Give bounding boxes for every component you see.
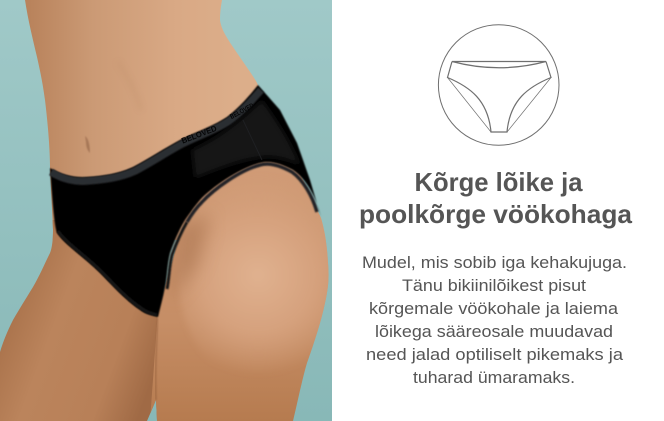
- waistband logo: BELOVED: [180, 124, 218, 145]
- icon leg lines: [448, 78, 551, 132]
- waistband logo: BELOVED: [229, 102, 255, 121]
- briefs: [50, 85, 321, 317]
- shadow under leg opening: [168, 216, 211, 288]
- torso skin: [0, 0, 332, 240]
- body line 1: Mudel, mis sobib iga kehakujuga.: [362, 254, 627, 272]
- icon briefs outline: [448, 62, 551, 132]
- right thigh skin: [150, 166, 328, 421]
- body text: [362, 254, 627, 387]
- lace panel: [192, 100, 300, 178]
- side seam: [243, 120, 262, 160]
- right thigh highlight: [181, 205, 328, 364]
- icon: briefs in circle: [438, 25, 559, 145]
- briefs body: [50, 85, 321, 317]
- leg binding lower: [58, 222, 187, 315]
- body line 4: lõikega sääreosale muudavad: [375, 323, 613, 341]
- body line 6: tuharad ümaramaks.: [413, 369, 575, 387]
- leg binding upper: [187, 164, 317, 222]
- panel: product photo: [0, 0, 340, 421]
- heading line 1: Kõrge lõike ja: [414, 167, 583, 197]
- waistband: [51, 90, 261, 181]
- icon circle: [438, 25, 559, 145]
- heading line 2: poolkõrge vöökohaga: [359, 199, 633, 229]
- body line 3: kõrgemale vöökohale ja laiema: [369, 300, 619, 318]
- heading: [359, 167, 633, 229]
- navel: [85, 136, 90, 153]
- body line 2: Tänu bikiinilõikest pisut: [402, 277, 586, 295]
- thigh crease: [156, 318, 158, 400]
- photo background: [0, 0, 332, 421]
- body line 5: need jalad optiliselt pikemaks ja: [366, 346, 624, 364]
- left thigh skin: [0, 220, 160, 421]
- body: [0, 0, 340, 421]
- abdominal crease: [118, 62, 141, 110]
